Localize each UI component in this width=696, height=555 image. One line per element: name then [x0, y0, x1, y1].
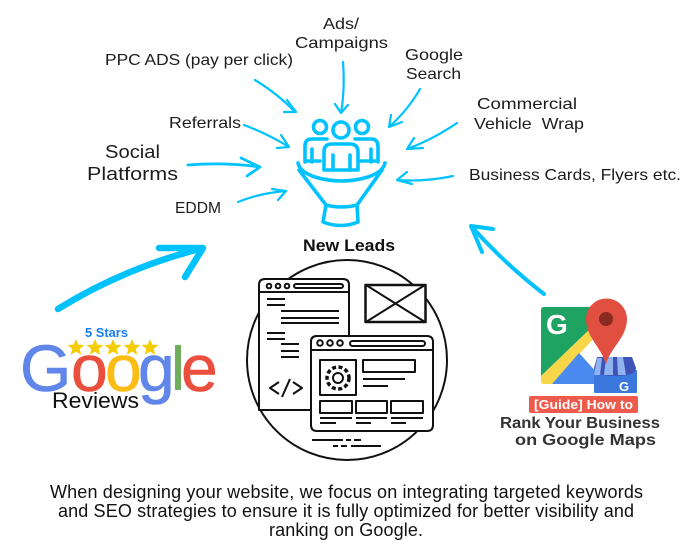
icon: people in funnel [298, 120, 385, 226]
label: Referrals: Referrals [169, 115, 241, 132]
label: Social Platforms [87, 142, 178, 184]
map tile [541, 307, 600, 384]
arrow: Referrals [244, 125, 289, 148]
maps title: on Google Maps [515, 432, 656, 449]
label: Ads/Campaigns: Ads/ [323, 16, 360, 33]
arrow: PPC [255, 80, 296, 112]
arrow: Google Search [389, 89, 420, 127]
caption text [50, 482, 643, 540]
caption text: and SEO strategies to ensure it is fully optimized for better visibility and [58, 501, 634, 521]
arrow: Maps to funnel [471, 226, 544, 294]
G letter on tile: G [546, 309, 568, 340]
arrow: Business Cards [397, 172, 453, 184]
label: PPC ads: PPC ADS (pay per click) [105, 52, 293, 69]
store [594, 357, 637, 394]
arrow: Reviews to funnel [58, 248, 203, 309]
Google wordmark [20, 331, 218, 405]
star rating [68, 339, 158, 355]
label: Ads/Campaigns [295, 16, 388, 52]
label: Business Cards: Business Cards, Flyers etc. [469, 167, 681, 184]
arrow: Ads [335, 62, 348, 113]
heading: New Leads: New Leads [303, 236, 395, 255]
5 Stars label: 5 Stars [85, 325, 128, 340]
label: Google Search: Google [405, 47, 463, 64]
arrow: Social [188, 158, 260, 176]
label: Commercial Vehicle Wrap: Commercial [477, 96, 577, 113]
arrow: Vehicle Wrap [407, 123, 457, 149]
arrow: EDDM [238, 189, 286, 202]
Google wordmark: g [138, 331, 175, 405]
Google wordmark: o [71, 331, 108, 405]
Google wordmark: o [105, 331, 142, 405]
Google wordmark: G [20, 331, 71, 405]
label: Commercial Vehicle Wrap: Vehicle Wrap [474, 116, 584, 133]
Google wordmark: e [181, 331, 218, 405]
icon: website illustration [247, 260, 447, 460]
maps title [500, 415, 660, 449]
Reviews word: Reviews [52, 388, 139, 413]
store: G [619, 379, 629, 394]
map pin [586, 298, 627, 365]
caption text: ranking on Google. [269, 520, 423, 540]
logo: Google Reviews [20, 325, 218, 413]
label: Ads/Campaigns: Campaigns [295, 35, 388, 52]
label: Social Platforms: Platforms [87, 164, 178, 184]
label: Google Search: Search [406, 66, 461, 83]
label: EDDM: EDDM [175, 200, 221, 217]
caption text: When designing your website, we focus on integrating targeted keywords [50, 482, 643, 502]
logo: Rank on Google Maps [500, 298, 660, 449]
label: Commercial Vehicle Wrap [474, 96, 584, 133]
guide banner: [Guide] How to [534, 397, 633, 412]
maps title: Rank Your Business [500, 415, 660, 432]
label: Social Platforms: Social [105, 142, 160, 162]
label: Google Search [405, 47, 463, 83]
